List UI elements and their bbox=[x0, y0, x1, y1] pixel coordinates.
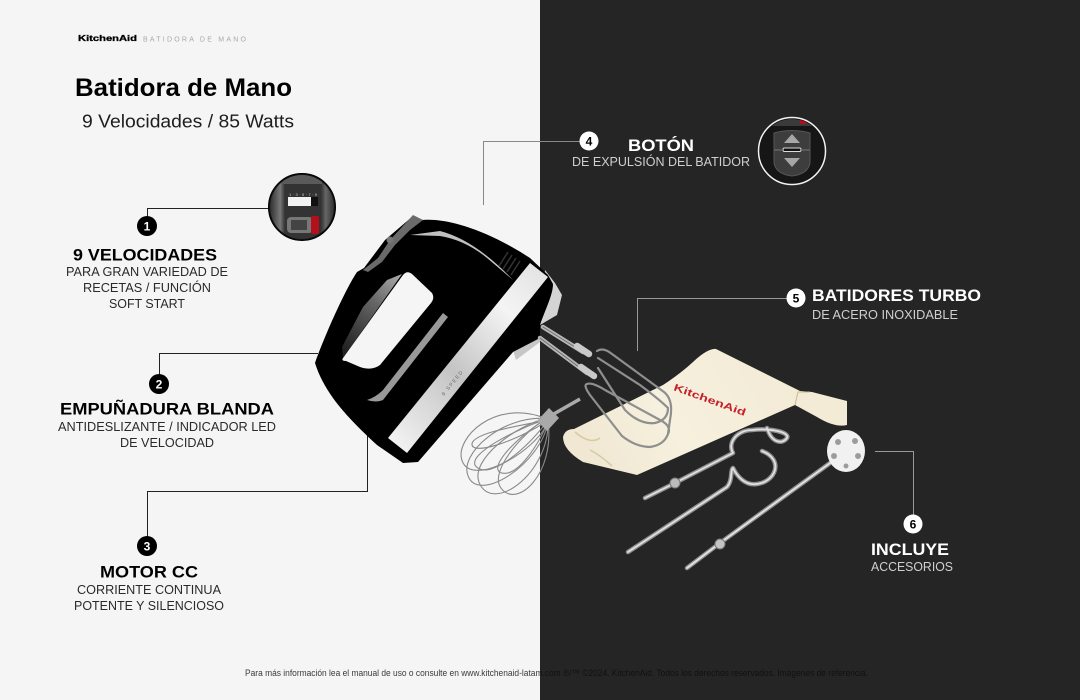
feature 2: empuñadura blanda: EMPUÑADURA BLANDA bbox=[60, 398, 274, 418]
feature 1: 9 velocidades: RECETAS / FUNCIÓN bbox=[83, 280, 211, 295]
feature 1: 9 velocidades: PARA GRAN VARIEDAD DE bbox=[66, 264, 228, 279]
panel: left light background bbox=[0, 0, 540, 700]
feature 3: motor cc: CORRIENTE CONTINUA bbox=[77, 582, 221, 597]
mixer: grip highlight bbox=[342, 274, 402, 358]
storage bag: KitchenAid bbox=[672, 382, 747, 419]
feature 5: batidores turbo: DE ACERO INOXIDABLE bbox=[812, 307, 958, 322]
accessory: flat beater bbox=[687, 430, 865, 568]
feature 6: incluye accesorios: ACCESORIOS bbox=[871, 559, 953, 574]
turbo beaters bbox=[540, 327, 671, 447]
brand header: BATIDORA DE MANO bbox=[143, 36, 247, 44]
mixer: speed label: 9 SPEED bbox=[441, 370, 465, 397]
feature 5: batidores turbo bbox=[786, 286, 981, 322]
feature 3: motor cc: 3 bbox=[144, 540, 151, 554]
feature 2: empuñadura blanda bbox=[58, 374, 276, 450]
feature 6: incluye accesorios bbox=[871, 514, 953, 574]
icon: ejector button thumbnail bbox=[758, 118, 826, 184]
feature 4: botón: 4 bbox=[586, 134, 593, 148]
mixer: handle opening bbox=[342, 272, 433, 369]
icon: speed control thumbnail: 1·3·5·7·9 bbox=[289, 192, 318, 197]
feature 1: 9 velocidades bbox=[66, 216, 228, 311]
feature 1: 9 velocidades: 1 bbox=[144, 220, 151, 234]
mixer: black body bbox=[315, 216, 553, 463]
feature 3: motor cc: POTENTE Y SILENCIOSO bbox=[74, 598, 224, 613]
feature 2: empuñadura blanda: ANTIDESLIZANTE / INDICADOR LED bbox=[58, 419, 276, 434]
storage bag bbox=[563, 349, 847, 475]
connector lines bbox=[148, 142, 914, 538]
panel: right dark background bbox=[540, 0, 1080, 700]
mixer: chrome collar and hub bbox=[540, 270, 562, 325]
accessory: dough hook 2 bbox=[628, 451, 775, 552]
feature 2: empuñadura blanda: 2 bbox=[156, 378, 163, 392]
mixer: vent slots bbox=[499, 252, 520, 275]
mixer: control switches bbox=[363, 215, 423, 272]
feature 1: 9 velocidades: SOFT START bbox=[109, 296, 185, 311]
subtitle: 9 Velocidades / 85 Watts bbox=[82, 110, 294, 132]
mixer: upper reflection bbox=[410, 231, 513, 280]
mixer: steel band bbox=[388, 263, 548, 453]
title: Batidora de Mano bbox=[75, 74, 292, 102]
feature 3: motor cc: MOTOR CC bbox=[100, 562, 198, 582]
feature 4: botón: BOTÓN bbox=[628, 136, 694, 155]
feature 2: empuñadura blanda: DE VELOCIDAD bbox=[120, 435, 214, 450]
feature 5: batidores turbo: BATIDORES TURBO bbox=[812, 286, 981, 305]
brand header bbox=[78, 33, 247, 44]
brand header: KitchenAid bbox=[78, 33, 137, 43]
feature 3: motor cc bbox=[74, 536, 224, 613]
mixer: lower grip reflection bbox=[367, 313, 448, 402]
feature 5: batidores turbo: 5 bbox=[793, 292, 800, 306]
feature 4: botón bbox=[572, 132, 750, 169]
accessory: dough hook 1 bbox=[645, 428, 787, 498]
hand mixer bbox=[315, 215, 562, 463]
footer disclaimer: Para más información lea el manual de uso o consulte en www.kitchenaid-latam.com ®/™ ©2024. KitchenAid. Todos los derechos reservados. Imágenes de referencia. bbox=[245, 668, 868, 678]
feature 6: incluye accesorios: 6 bbox=[910, 518, 917, 532]
balloon whisk bbox=[447, 391, 580, 513]
icon: speed control thumbnail bbox=[268, 174, 336, 242]
feature 4: botón: DE EXPULSIÓN DEL BATIDOR bbox=[572, 154, 750, 169]
feature 6: incluye accesorios: INCLUYE bbox=[871, 540, 949, 559]
feature 1: 9 velocidades: 9 VELOCIDADES bbox=[73, 246, 217, 264]
